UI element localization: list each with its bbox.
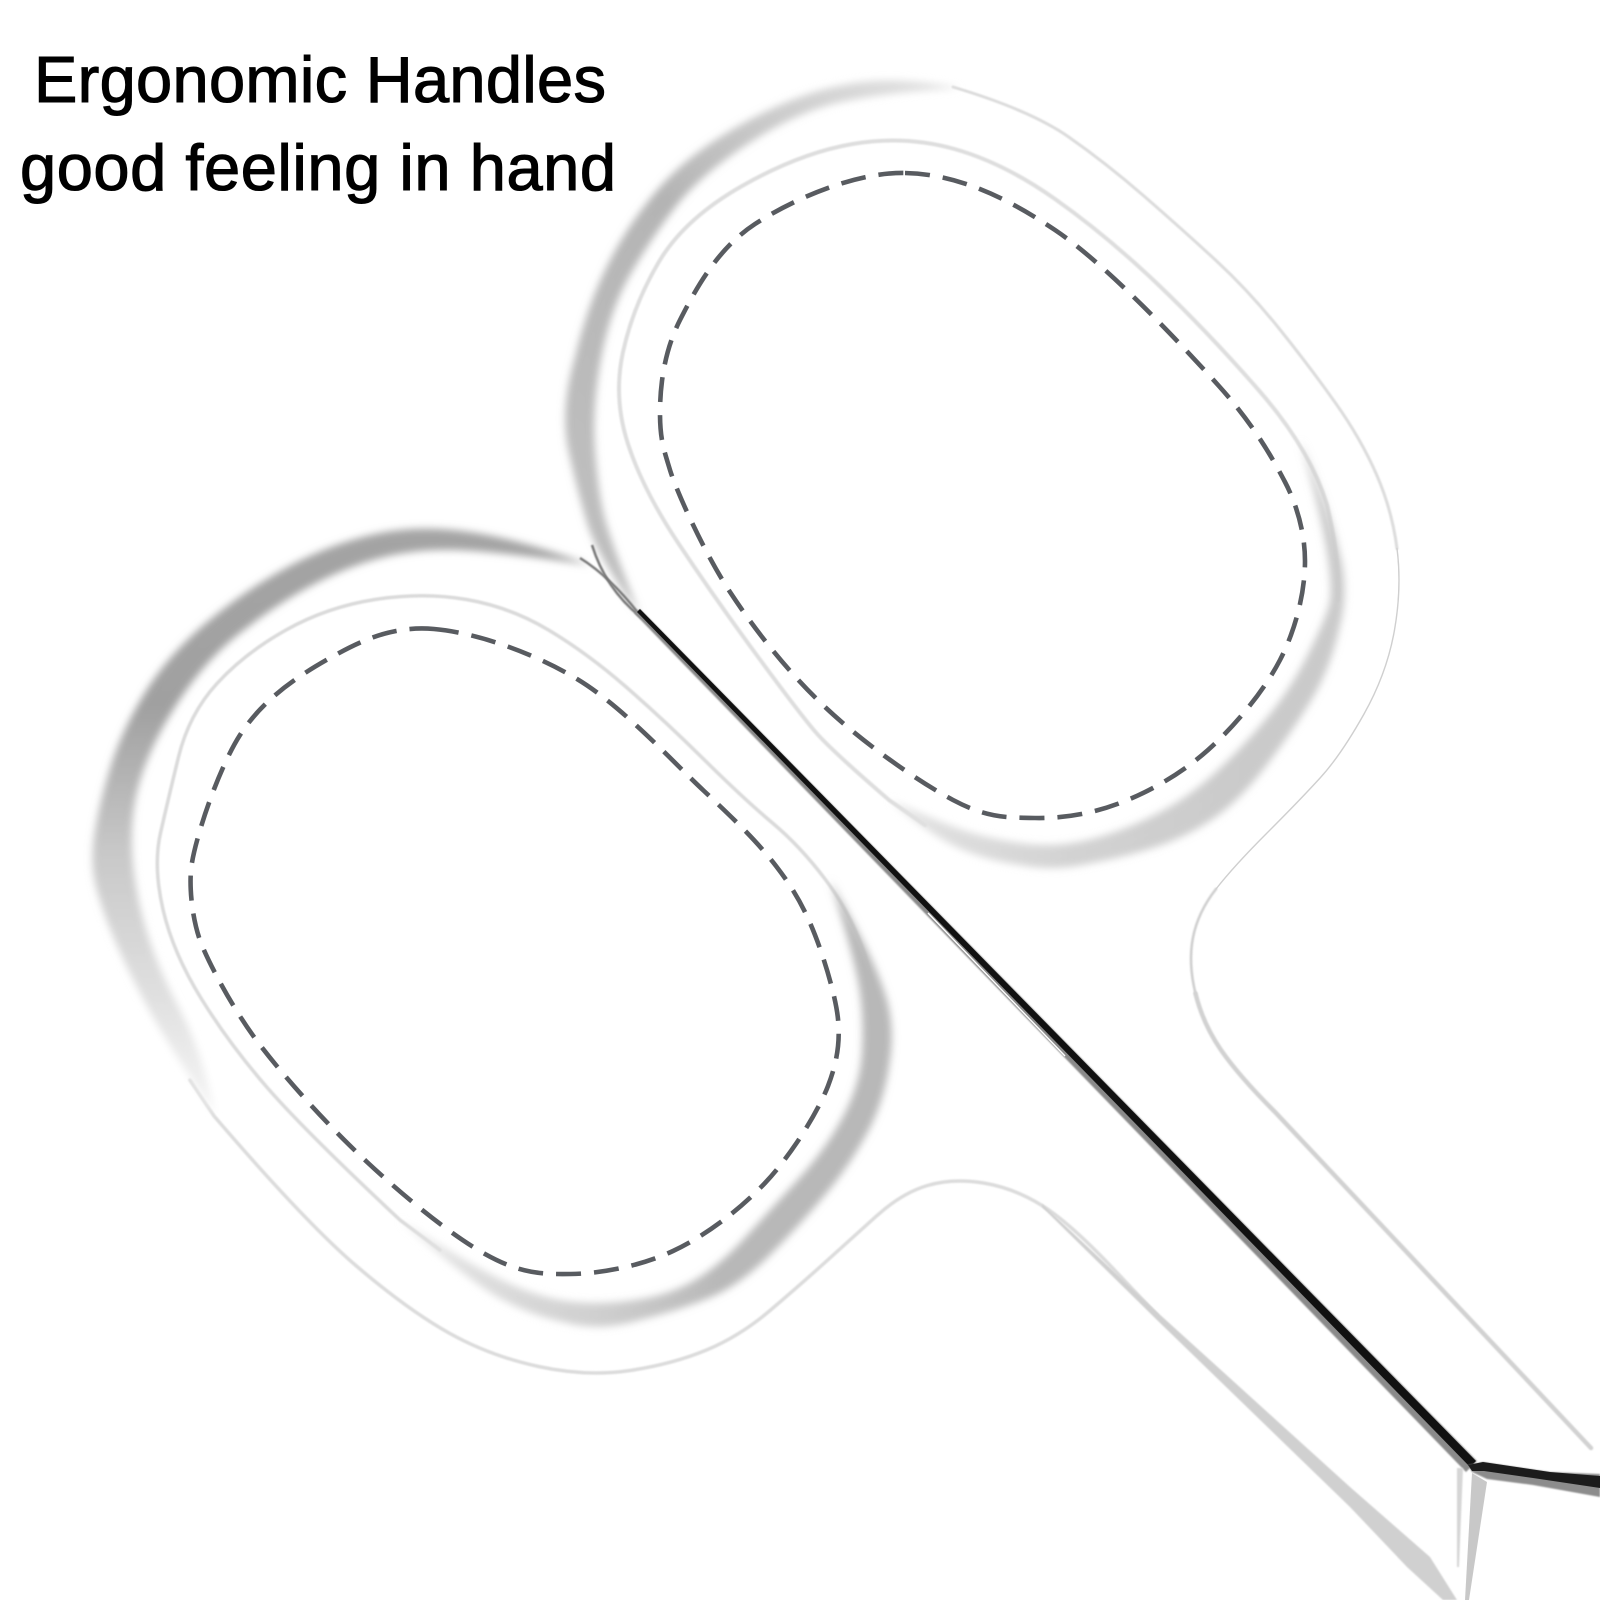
pivot edge: dark center line — [634, 609, 1477, 1472]
lower blade edge — [1042, 1204, 1457, 1600]
blade sliver: right — [1465, 1473, 1487, 1600]
title: ergonomic handles: good feeling in hand — [20, 131, 616, 204]
title: ergonomic handles: Ergonomic Handles — [34, 43, 606, 116]
blade tip: right arm — [1468, 1462, 1600, 1497]
blade sliver: left — [1457, 1468, 1463, 1567]
lower finger loop — [92, 529, 1157, 1373]
upper finger loop — [565, 80, 1591, 1448]
stitched dashed line: upper loop — [660, 173, 1305, 818]
stitched dashed line: lower loop — [191, 628, 839, 1274]
title: ergonomic handles — [20, 43, 616, 204]
